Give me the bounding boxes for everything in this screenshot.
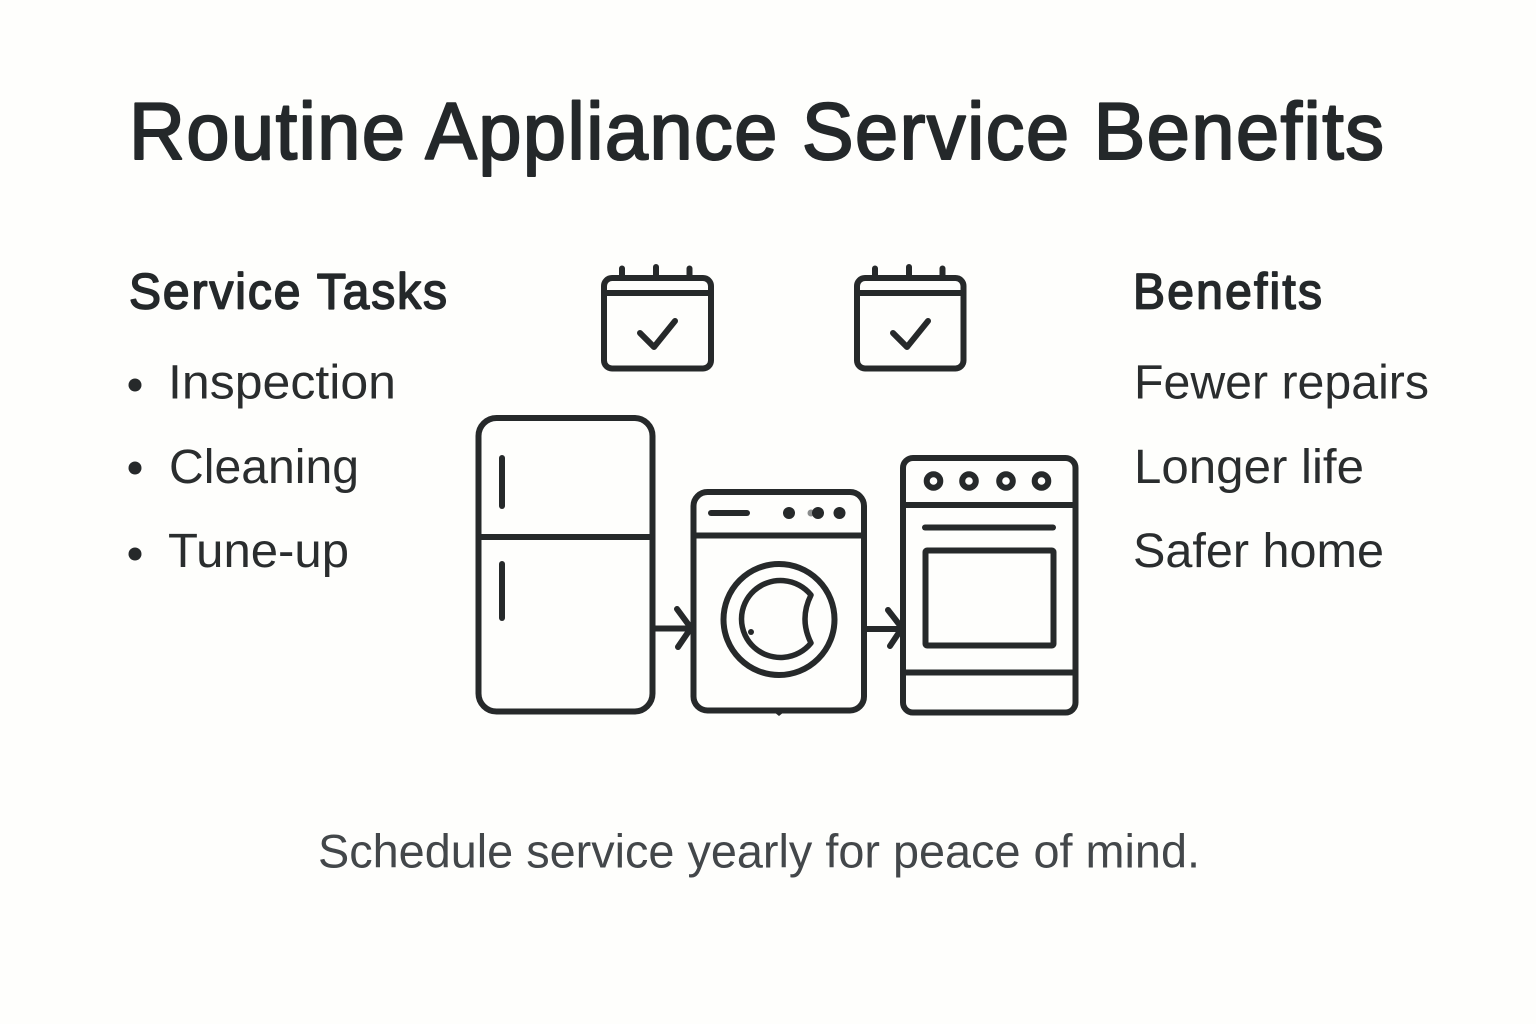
panel: benefits [1133, 265, 1429, 578]
list item: cleaning: Cleaning [169, 441, 359, 494]
heading: benefits: Benefits [1133, 265, 1322, 320]
benefit: longer life: Longer life [1134, 441, 1364, 494]
footer note: Schedule service yearly for peace of mind. [318, 824, 1200, 878]
arrow: washer to stove [866, 610, 902, 646]
icon: calendar left [604, 267, 711, 368]
title: Routine Appliance Service Benefits [129, 86, 1384, 176]
icon: calendar right [857, 267, 964, 368]
icon: stove [903, 458, 1076, 712]
benefit: fewer repairs: Fewer repairs [1134, 356, 1429, 410]
panel: service tasks [128, 265, 447, 578]
nub under washer [774, 712, 784, 716]
heading: service tasks: Service Tasks [129, 265, 447, 320]
list item: tune-up: Tune-up [168, 525, 349, 578]
benefit: safer home: Safer home [1133, 525, 1384, 578]
icon: washing machine [694, 492, 864, 716]
list item: inspection: Inspection [168, 356, 396, 410]
icon: refrigerator [478, 418, 652, 712]
arrow: refrigerator to washer [655, 609, 691, 647]
